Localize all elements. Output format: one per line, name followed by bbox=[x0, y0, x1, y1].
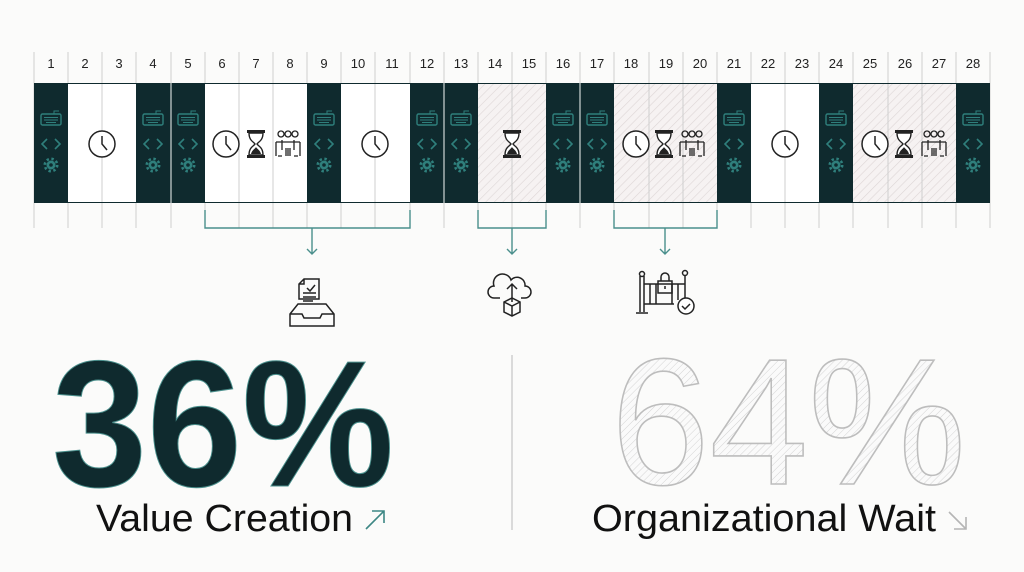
column numbers: 6 bbox=[218, 56, 226, 71]
column numbers: 12 bbox=[420, 56, 434, 71]
column numbers: 20 bbox=[693, 56, 707, 71]
column numbers: 26 bbox=[898, 56, 912, 71]
column numbers: 24 bbox=[829, 56, 843, 71]
column numbers bbox=[47, 56, 980, 71]
column numbers: 11 bbox=[385, 56, 399, 71]
column numbers: 15 bbox=[522, 56, 536, 71]
column numbers: 25 bbox=[863, 56, 877, 71]
icon: locked gate bbox=[636, 270, 694, 314]
column numbers: 7 bbox=[252, 56, 260, 71]
column numbers: 8 bbox=[286, 56, 294, 71]
brackets with arrows bbox=[205, 210, 717, 254]
column numbers: 22 bbox=[761, 56, 775, 71]
column numbers: 3 bbox=[115, 56, 123, 71]
column numbers: 13 bbox=[454, 56, 468, 71]
column numbers: 28 bbox=[966, 56, 980, 71]
column numbers: 4 bbox=[149, 56, 157, 71]
stat: 64% organizational wait: Organizational Wait bbox=[592, 498, 936, 540]
column numbers: 17 bbox=[590, 56, 604, 71]
column numbers: 18 bbox=[624, 56, 638, 71]
stat: 64% organizational wait: 64% bbox=[611, 322, 966, 523]
timeline strip bbox=[34, 83, 990, 203]
stat: 36% value creation: Value Creation bbox=[96, 498, 353, 540]
column numbers: 1 bbox=[47, 56, 55, 71]
column numbers: 2 bbox=[81, 56, 89, 71]
column numbers: 5 bbox=[184, 56, 192, 71]
column numbers: 23 bbox=[795, 56, 809, 71]
icon: cloud upload bbox=[488, 274, 531, 316]
column numbers: 27 bbox=[932, 56, 946, 71]
column numbers: 16 bbox=[556, 56, 570, 71]
column numbers: 21 bbox=[727, 56, 741, 71]
column numbers: 14 bbox=[488, 56, 502, 71]
column numbers: 19 bbox=[659, 56, 673, 71]
stat: 36% value creation: 36% bbox=[52, 324, 394, 525]
divider bbox=[511, 355, 513, 530]
column numbers: 9 bbox=[320, 56, 328, 71]
icon: inbox document bbox=[290, 279, 334, 326]
column numbers: 10 bbox=[351, 56, 365, 71]
